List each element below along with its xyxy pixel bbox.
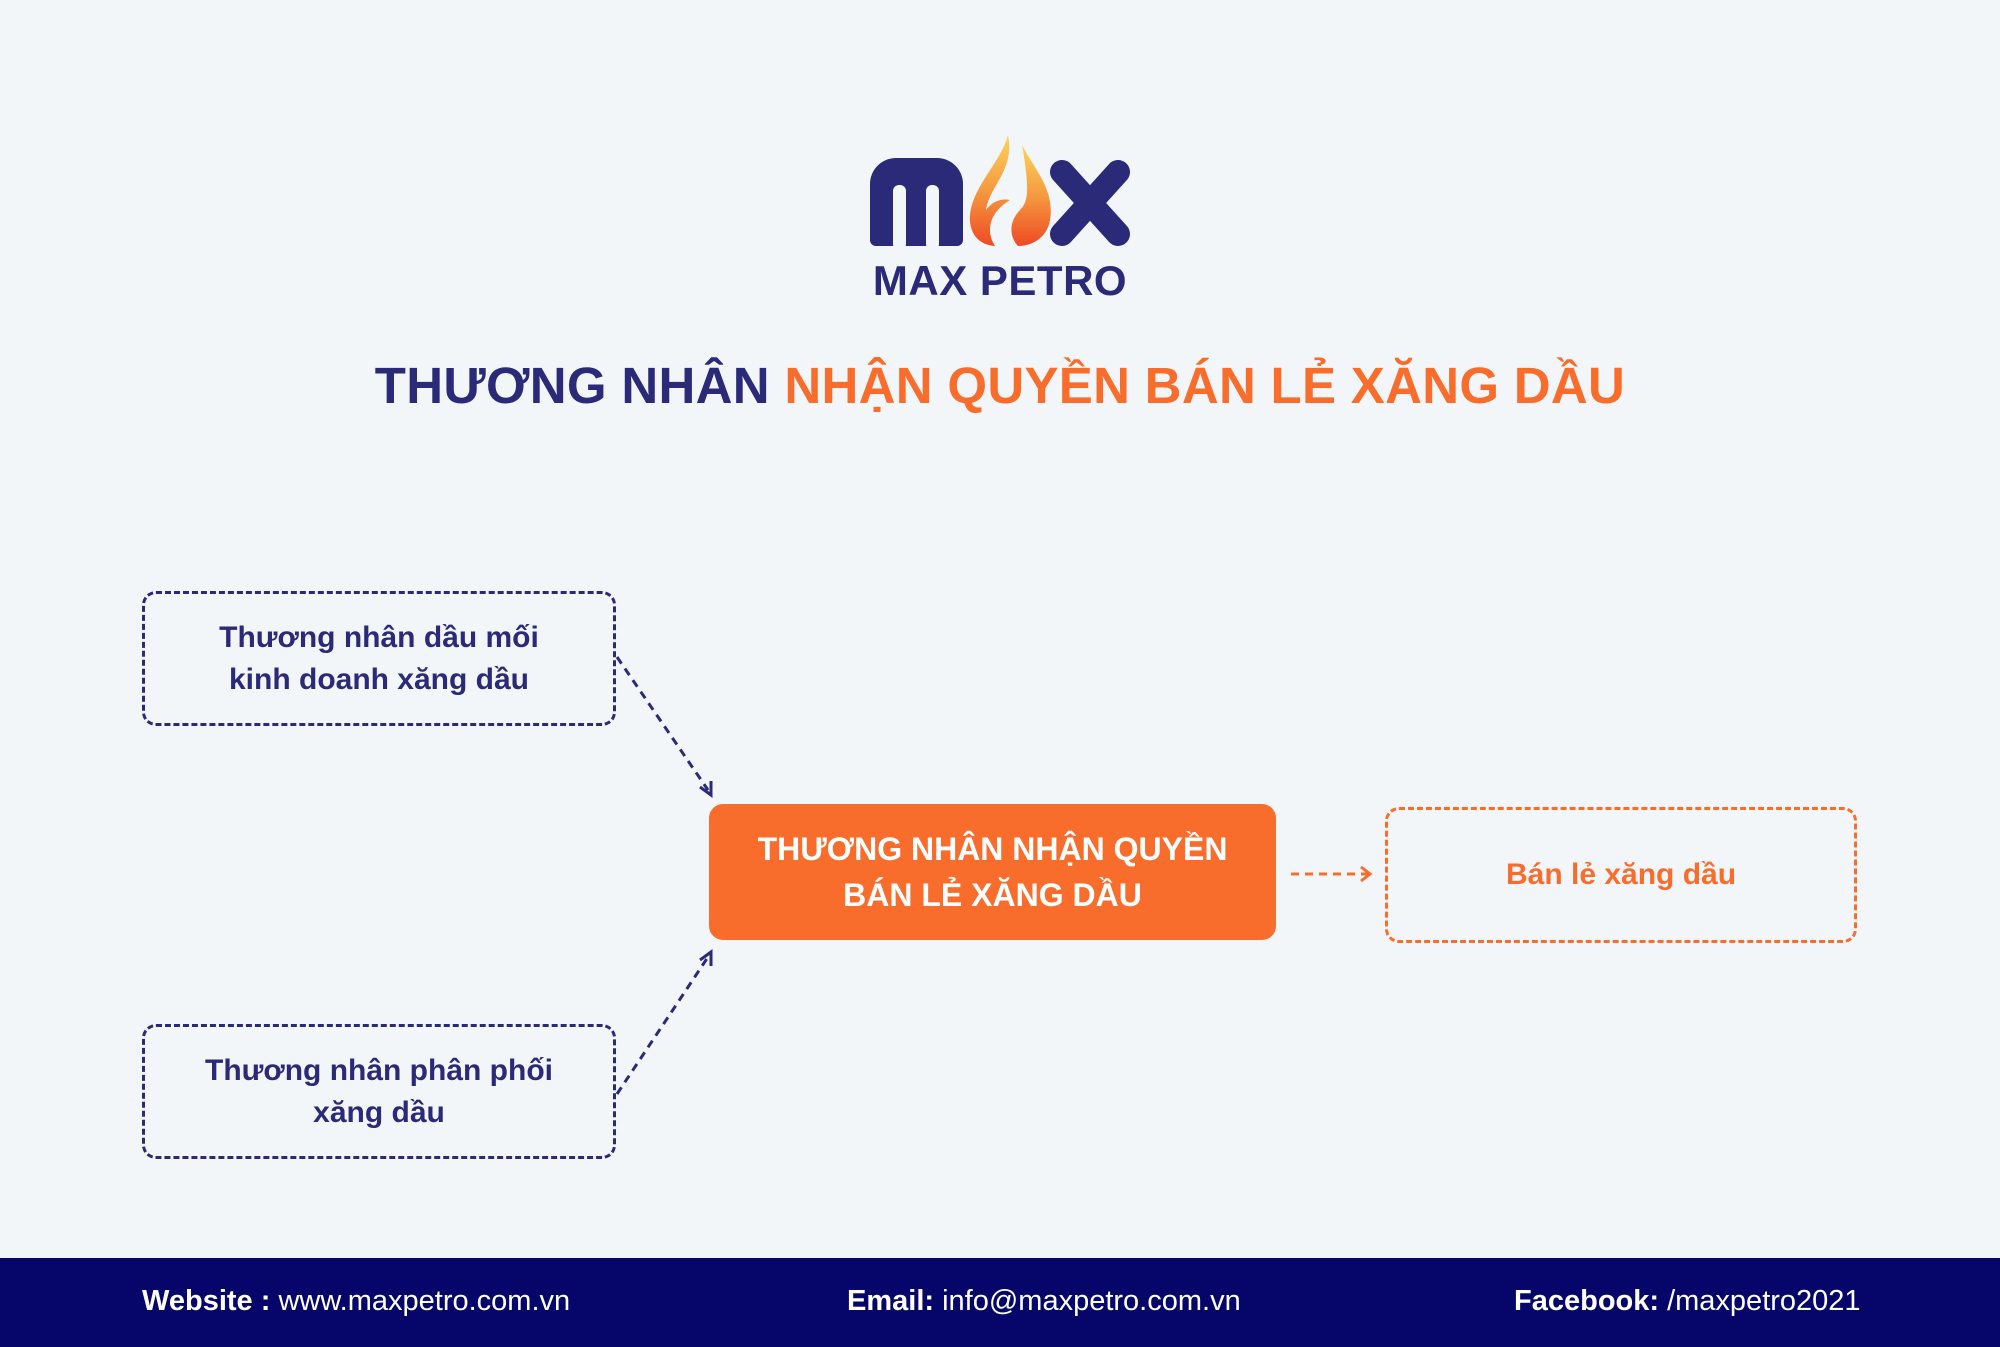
footer: website: Website : www.maxpetro.com.vn xyxy=(142,1285,570,1317)
arrow: center to right xyxy=(1291,867,1370,881)
box: thuong nhan dau moi: kinh doanh xăng dầu xyxy=(229,662,529,696)
arrow: top to center xyxy=(617,657,711,795)
box: thuong nhan phan phoi xyxy=(142,1024,616,1159)
box: thuong nhan dau moi xyxy=(142,591,616,726)
icon: M xyxy=(870,158,963,250)
box: thuong nhan phan phoi: xăng dầu xyxy=(313,1096,445,1128)
icon: X xyxy=(1062,172,1118,234)
footer: facebook: Facebook: /maxpetro2021 xyxy=(1514,1285,1861,1317)
box: center: THƯƠNG NHÂN NHẬN QUYỀN xyxy=(758,831,1227,867)
logo xyxy=(870,135,1130,304)
box: thuong nhan dau moi: Thương nhân dầu mối xyxy=(219,620,539,654)
title: THƯƠNG NHÂN NHẬN QUYỀN BÁN LẺ XĂNG DẦU xyxy=(375,357,1625,414)
icon: flame xyxy=(970,135,1051,246)
footer: email: Email: info@maxpetro.com.vn xyxy=(847,1285,1241,1317)
box: center xyxy=(709,804,1276,940)
box: center: BÁN LẺ XĂNG DẦU xyxy=(843,877,1142,913)
logo text: MAX PETRO xyxy=(873,257,1127,304)
arrow: bottom to center xyxy=(617,952,711,1094)
footer xyxy=(0,1258,2000,1347)
box: thuong nhan phan phoi: Thương nhân phân phối xyxy=(205,1054,553,1086)
box: ban le xyxy=(1385,807,1857,943)
box: ban le: Bán lẻ xăng dầu xyxy=(1506,858,1736,891)
